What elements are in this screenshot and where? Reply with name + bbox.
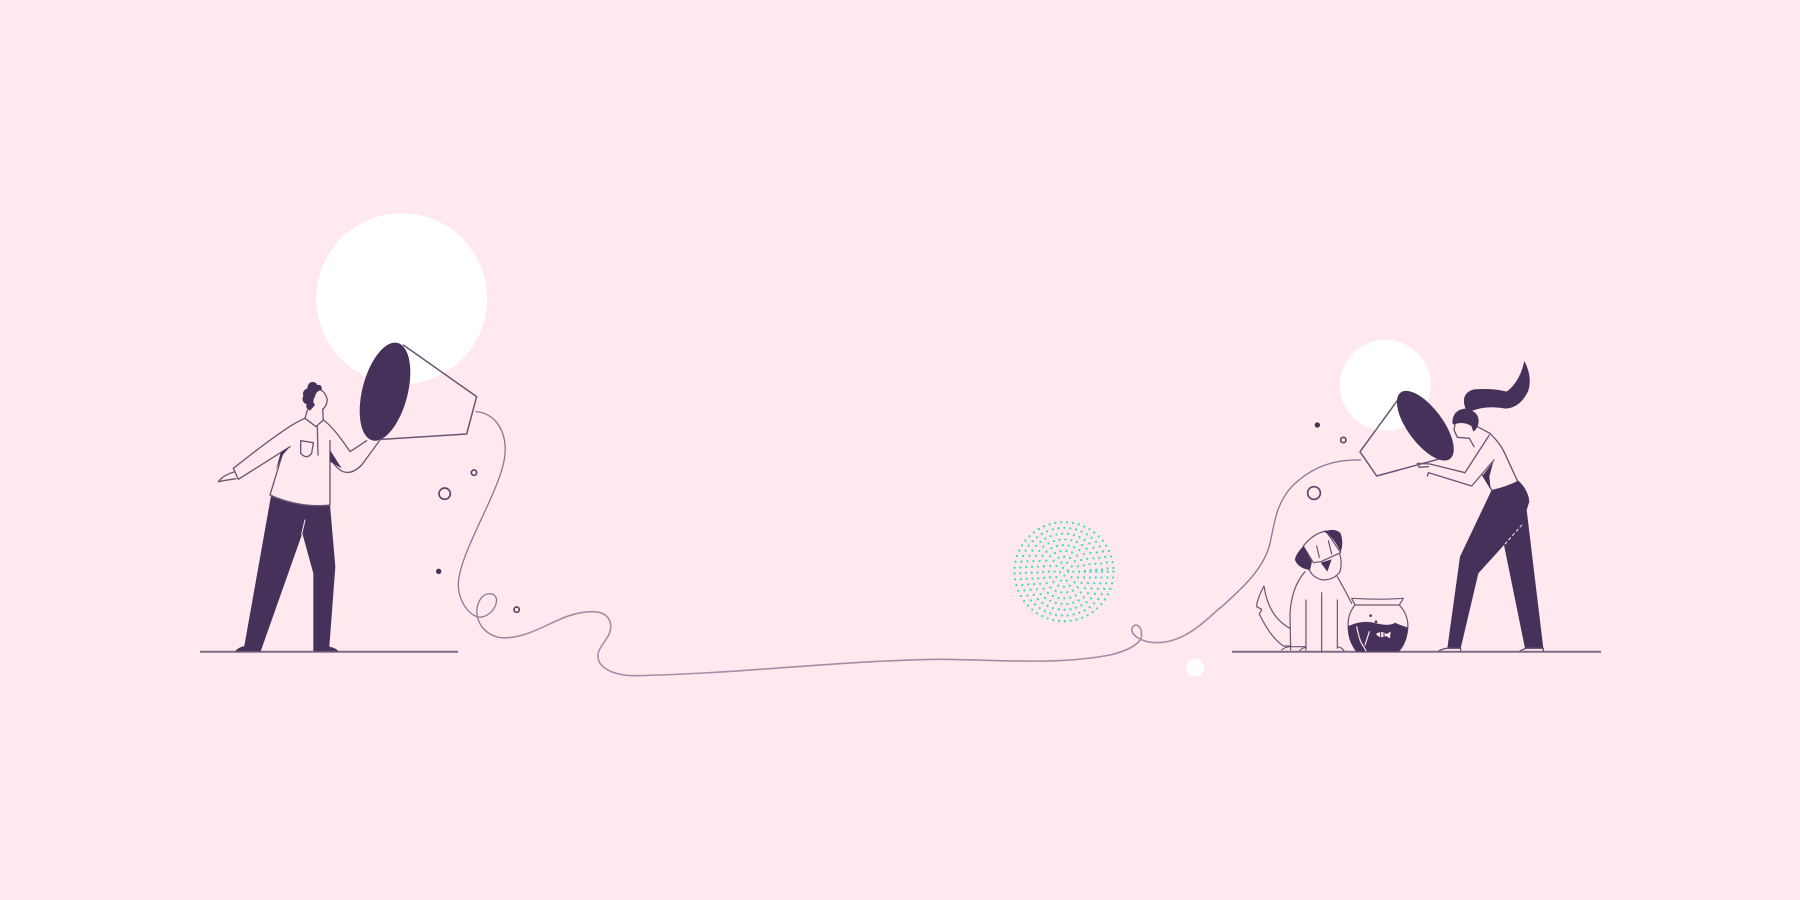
cup mouth — [1387, 382, 1464, 469]
white circle behind man — [316, 213, 487, 384]
ground line left — [200, 651, 458, 653]
pocket — [301, 441, 313, 457]
trouser crease — [302, 520, 305, 534]
dog and fishbowl — [1257, 530, 1408, 652]
dog body — [1290, 572, 1352, 652]
trousers — [1447, 481, 1543, 648]
teal dotted circle — [1014, 522, 1114, 621]
cup body — [382, 345, 477, 439]
white circle behind woman — [1340, 340, 1431, 431]
woman: upper body — [1417, 361, 1530, 490]
underarm shadow — [1482, 462, 1493, 489]
hair — [303, 382, 322, 411]
dog head — [1303, 531, 1341, 580]
cup mouth — [350, 337, 420, 446]
dog paws — [1282, 647, 1344, 651]
sleeve shadows — [276, 447, 342, 470]
bowl bubbles — [1369, 614, 1372, 617]
floating bubbles left — [436, 470, 519, 612]
fish — [1376, 632, 1391, 638]
man: trousers, cup — [235, 337, 477, 651]
top — [1477, 427, 1517, 490]
floating bubbles right — [1308, 422, 1346, 499]
hand — [218, 472, 236, 482]
face — [1454, 425, 1474, 447]
trouser stitching — [1505, 523, 1523, 544]
ponytail — [1464, 361, 1530, 411]
string: left section — [458, 412, 508, 638]
placket — [315, 427, 320, 455]
head and neck — [305, 390, 327, 427]
dog nose — [1321, 559, 1332, 572]
dog ears — [1295, 530, 1342, 570]
cup body — [1360, 398, 1442, 476]
plant — [1357, 627, 1369, 651]
ground line right — [1232, 651, 1601, 653]
fish markings — [1381, 632, 1384, 637]
shoes — [1439, 648, 1543, 652]
shirt — [233, 418, 380, 506]
fishbowl water — [1348, 622, 1408, 652]
arm — [1417, 435, 1494, 486]
hair — [1452, 409, 1479, 432]
string: middle section — [508, 608, 1220, 676]
woman: trousers and cup — [1360, 382, 1543, 652]
fishbowl — [1348, 598, 1408, 652]
man: upper body — [218, 382, 380, 506]
string: right section — [1220, 460, 1361, 608]
small white dot — [1186, 659, 1204, 677]
trousers — [235, 496, 338, 651]
dog tail — [1257, 586, 1291, 646]
